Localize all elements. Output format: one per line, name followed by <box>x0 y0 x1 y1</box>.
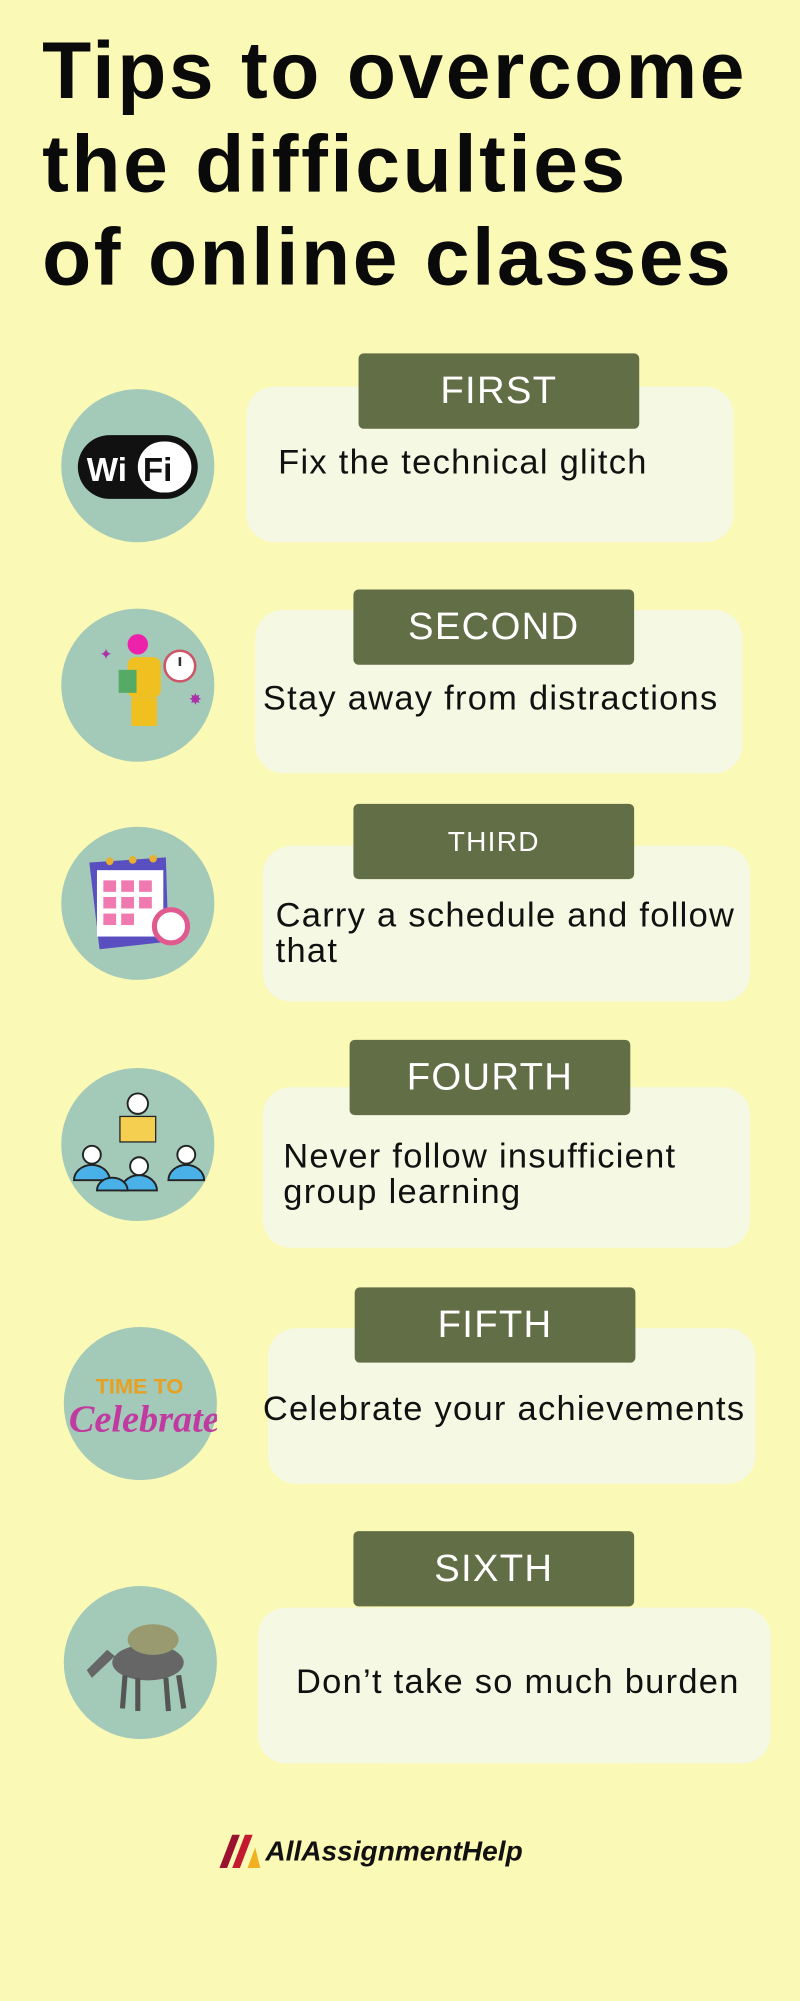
label: first: FIRST <box>440 370 557 412</box>
text: third <box>276 896 735 970</box>
label: third: THIRD <box>448 826 540 857</box>
text: fifth: Celebrate your achievements <box>263 1389 745 1428</box>
logo: AllAssignmentHelp <box>265 1835 523 1867</box>
icon: group <box>61 1068 214 1221</box>
label: fourth: FOURTH <box>407 1056 573 1099</box>
icon: distraction: ✸ <box>189 691 202 708</box>
icon: calendar <box>61 827 214 980</box>
label: third <box>353 804 634 879</box>
text: second: Stay away from distractions <box>263 679 719 717</box>
icon: distraction <box>61 609 214 762</box>
text: third: Carry a schedule and follow <box>276 896 735 934</box>
label: first <box>359 353 639 429</box>
label: fifth <box>355 1287 635 1363</box>
label: fourth <box>350 1040 630 1115</box>
text: fourth <box>283 1137 676 1211</box>
icon: wifi: Wi <box>87 452 127 489</box>
text: third: that <box>276 931 338 970</box>
label: second <box>353 589 634 665</box>
icon: wifi <box>61 389 214 542</box>
label: second: SECOND <box>408 606 579 648</box>
panel: sixth <box>258 1608 771 1763</box>
icon: celebrate: TIME TO <box>96 1373 183 1398</box>
label: fifth: FIFTH <box>438 1304 552 1346</box>
title <box>42 27 747 302</box>
panel: third <box>263 846 750 1002</box>
panel: fourth <box>263 1087 750 1248</box>
title: the difficulties <box>42 120 628 209</box>
text: fourth: group learning <box>283 1173 521 1211</box>
text: sixth: Don’t take so much burden <box>296 1663 740 1701</box>
text: first: Fix the technical glitch <box>278 443 648 481</box>
text: fourth: Never follow insufficient <box>283 1137 676 1175</box>
panel: fifth <box>268 1328 755 1484</box>
panel: second <box>255 610 743 773</box>
icon: celebrate: Celebrate <box>69 1399 217 1441</box>
label: sixth: SIXTH <box>434 1548 553 1590</box>
title: Tips to overcome <box>42 27 747 116</box>
panel: first <box>246 387 734 542</box>
icon: donkey <box>64 1586 217 1739</box>
title: of online classes <box>42 213 733 302</box>
icon: distraction: ✦ <box>100 647 112 664</box>
label: sixth <box>353 1531 634 1606</box>
icon: wifi: Fi <box>143 452 172 489</box>
icon: celebrate <box>64 1327 217 1480</box>
